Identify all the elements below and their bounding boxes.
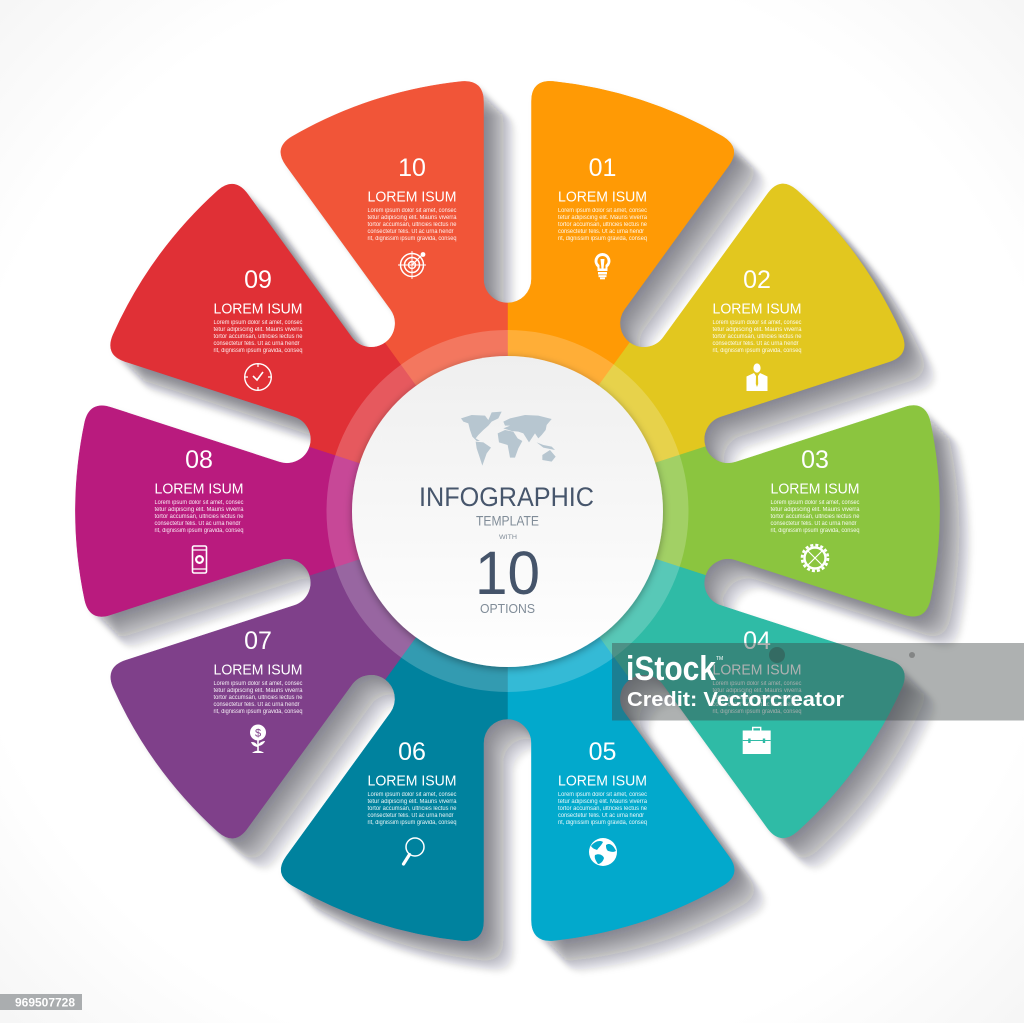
segment 09 shape	[99, 163, 577, 511]
text block: option 07: 07	[244, 627, 272, 655]
text block: option 09: LOREM ISUM	[214, 301, 302, 318]
text block: option 08: tortor accumsan, ultricies lectus ne	[154, 514, 244, 520]
text block: option 02: tetur adipiscing elit. Mauris viverra	[712, 327, 802, 333]
icon: gear	[802, 545, 828, 571]
segment 10 shape	[255, 30, 691, 511]
text block: option 03: rit, dignissim ipsum gravida, conseq	[770, 528, 860, 534]
segment 06 shape	[281, 511, 508, 941]
text block: option 07: rit, dignissim ipsum gravida, conseq	[214, 709, 302, 715]
text block: option 10: consectetur felis. Ut ac urna hendr	[368, 229, 454, 235]
text block: option 02: LOREM ISUM	[712, 301, 802, 318]
text block: option 03: consectetur felis. Ut ac urna hendr	[770, 521, 856, 527]
text block: option 02	[712, 266, 802, 354]
text block: option 08: Lorem ipsum dolor sit amet, consec	[154, 500, 244, 506]
text block: option 04: consectetur felis. Ut ac urna hendr	[712, 702, 798, 708]
centre heading: INFOGRAPHIC: INFOGRAPHIC	[419, 482, 594, 512]
icon: world map	[461, 412, 556, 466]
text block: option 06: LOREM ISUM	[368, 773, 456, 790]
icon: target	[398, 251, 426, 279]
text block: option 02: tortor accumsan, ultricies lectus ne	[712, 334, 802, 340]
text block: option 06	[368, 738, 457, 826]
text block: option 09	[214, 266, 303, 354]
text block: option 05: 05	[589, 738, 616, 766]
text block: option 10: tortor accumsan, ultricies lectus ne	[368, 222, 457, 228]
text block: option 09: consectetur felis. Ut ac urna hendr	[214, 341, 300, 347]
icon: light bulb	[595, 253, 610, 279]
text block: option 09: rit, dignissim ipsum gravida, conseq	[214, 348, 302, 354]
text block: option 05: tetur adipiscing elit. Mauris viverra	[558, 799, 648, 805]
text block: option 06: tortor accumsan, ultricies lectus ne	[368, 806, 457, 812]
segment 03 shape	[508, 378, 986, 726]
text block: option 03	[770, 446, 860, 534]
text block: option 06: consectetur felis. Ut ac urna hendr	[368, 813, 454, 819]
text block: option 09: Lorem ipsum dolor sit amet, consec	[214, 320, 302, 326]
icon: businessman	[746, 363, 768, 391]
watermark band: iStock	[626, 650, 716, 688]
text block: option 03: LOREM ISUM	[770, 481, 860, 498]
text block: option 04	[712, 627, 802, 715]
text block: option 01: LOREM ISUM	[558, 189, 647, 206]
text block: option 03: tetur adipiscing elit. Mauris viverra	[770, 507, 860, 513]
text block: option 10: 10	[398, 154, 426, 182]
text block: option 05	[558, 738, 648, 826]
segment 02 shape	[508, 163, 943, 644]
stock id badge: 969507728	[15, 996, 75, 1010]
centre label: WITH: WITH	[499, 535, 517, 541]
text block: option 01: consectetur felis. Ut ac urna hendr	[558, 229, 644, 235]
centre disc	[352, 356, 663, 667]
text block: option 07: tetur adipiscing elit. Mauris viverra	[214, 688, 303, 694]
segment 04 shape	[438, 511, 916, 859]
text block: option 03: Lorem ipsum dolor sit amet, consec	[770, 500, 860, 506]
watermark band: TM	[716, 656, 723, 662]
text block: option 05: tortor accumsan, ultricies lectus ne	[558, 806, 648, 812]
text block: option 04: 04	[743, 627, 771, 655]
text block: option 09: 09	[244, 266, 272, 294]
text block: option 04: tortor accumsan, ultricies lectus ne	[712, 695, 802, 701]
watermark band: Credit: Vectorcreator	[627, 689, 844, 711]
text block: option 07: Lorem ipsum dolor sit amet, consec	[214, 681, 302, 687]
text block: option 05: consectetur felis. Ut ac urna hendr	[558, 813, 644, 819]
text block: option 07: tortor accumsan, ultricies lectus ne	[214, 695, 303, 701]
text block: option 02: consectetur felis. Ut ac urna hendr	[712, 341, 798, 347]
text block: option 06: tetur adipiscing elit. Mauris viverra	[368, 799, 457, 805]
icon: money plant: $	[255, 728, 261, 740]
text block: option 06: 06	[398, 738, 426, 766]
text block: option 10: Lorem ipsum dolor sit amet, consec	[368, 208, 456, 214]
text block: option 07: LOREM ISUM	[214, 662, 302, 679]
centre label: OPTIONS: OPTIONS	[480, 601, 535, 616]
text block: option 10: rit, dignissim ipsum gravida, conseq	[368, 236, 456, 242]
text block: option 06: rit, dignissim ipsum gravida, conseq	[368, 820, 456, 826]
text block: option 04: tetur adipiscing elit. Mauris viverra	[712, 688, 802, 694]
icon: magnifier	[404, 838, 424, 864]
stock id badge	[0, 994, 82, 1010]
glass ring around the centre disc	[340, 343, 676, 679]
text block: option 08: tetur adipiscing elit. Mauris viverra	[154, 507, 244, 513]
text block: option 05: LOREM ISUM	[558, 773, 647, 790]
text block: option 04: rit, dignissim ipsum gravida, conseq	[712, 709, 802, 715]
text block: option 05: Lorem ipsum dolor sit amet, consec	[558, 792, 647, 798]
segment 07 shape	[72, 378, 508, 859]
segment 08 shape	[29, 296, 508, 644]
text block: option 09: tetur adipiscing elit. Mauris viverra	[214, 327, 303, 333]
icon: briefcase	[743, 728, 771, 754]
text block: option 08	[154, 446, 244, 534]
centre number: 10: 10	[475, 539, 540, 607]
centre subheading: TEMPLATE: TEMPLATE	[476, 514, 539, 528]
segment 01 shape	[508, 81, 734, 511]
text block: option 01: Lorem ipsum dolor sit amet, consec	[558, 208, 647, 214]
watermark band	[612, 643, 1024, 720]
text block: option 08: LOREM ISUM	[154, 481, 244, 498]
text block: option 01: tetur adipiscing elit. Mauris viverra	[558, 215, 648, 221]
icon: globe	[589, 838, 617, 866]
text block: option 02: Lorem ipsum dolor sit amet, consec	[712, 320, 802, 326]
text block: option 06: Lorem ipsum dolor sit amet, consec	[368, 792, 456, 798]
text block: option 07: consectetur felis. Ut ac urna hendr	[214, 702, 300, 708]
text block: option 03: tortor accumsan, ultricies lectus ne	[770, 514, 860, 520]
icon: clock	[245, 364, 271, 390]
text block: option 10	[368, 154, 457, 242]
text block: option 08: consectetur felis. Ut ac urna hendr	[154, 521, 240, 527]
segment 05 shape	[324, 511, 760, 992]
icon: money plant	[250, 724, 266, 753]
text block: option 02: rit, dignissim ipsum gravida, conseq	[712, 348, 802, 354]
text block: option 04: Lorem ipsum dolor sit amet, consec	[712, 681, 802, 687]
text block: option 03: 03	[801, 446, 829, 474]
text block: option 07	[214, 627, 303, 715]
text block: option 08: rit, dignissim ipsum gravida, conseq	[154, 528, 244, 534]
text block: option 02: 02	[743, 266, 771, 294]
text block: option 01	[558, 154, 648, 242]
text block: option 10: tetur adipiscing elit. Mauris viverra	[368, 215, 457, 221]
text block: option 08: 08	[185, 446, 213, 474]
text block: option 04: LOREM ISUM	[712, 662, 802, 679]
icon: smartphone	[192, 546, 206, 573]
text block: option 09: tortor accumsan, ultricies lectus ne	[214, 334, 303, 340]
text block: option 01: tortor accumsan, ultricies lectus ne	[558, 222, 648, 228]
text block: option 01: rit, dignissim ipsum gravida, conseq	[558, 236, 647, 242]
text block: option 01: 01	[589, 154, 616, 182]
text block: option 10: LOREM ISUM	[368, 189, 456, 206]
text block: option 05: rit, dignissim ipsum gravida, conseq	[558, 820, 647, 826]
